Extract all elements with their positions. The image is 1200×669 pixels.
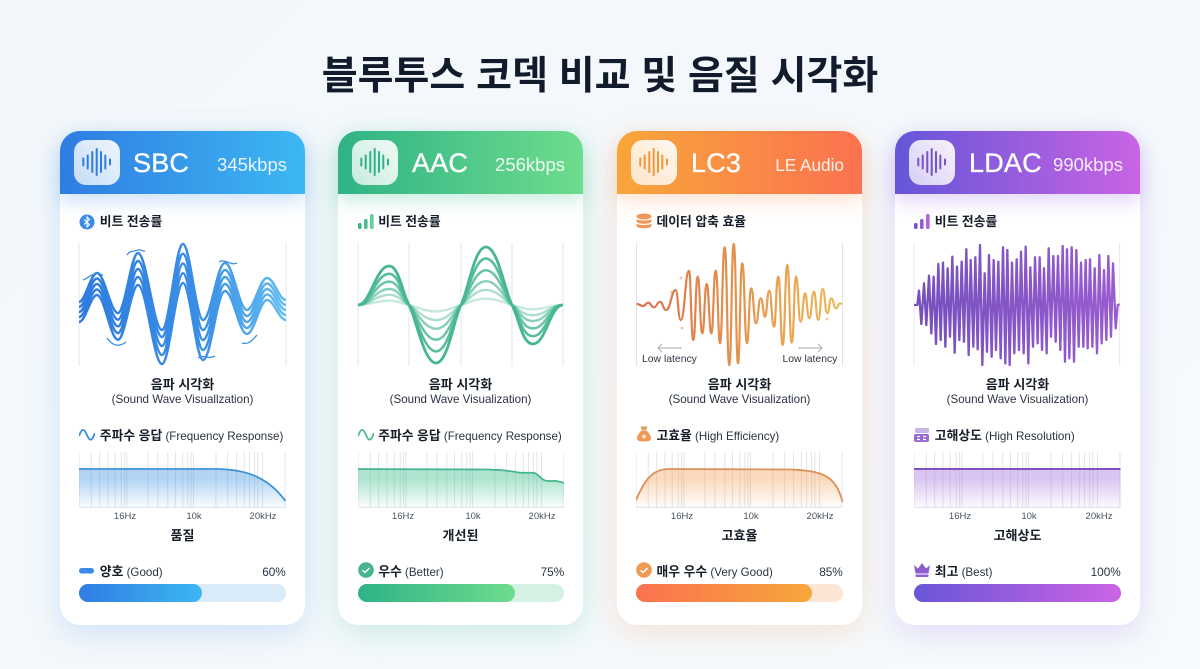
- axis labels: 16Hz: [392, 511, 414, 522]
- wave caption: 음파 시각화: [151, 377, 214, 392]
- icon: sound wave: [631, 140, 677, 185]
- codec name: AAC: [412, 148, 468, 178]
- icon: signal bars: [914, 214, 930, 229]
- panel: LDAC: 10k: [1021, 511, 1037, 522]
- axis labels: 16Hz: [949, 511, 971, 522]
- LDAC header: [895, 131, 1140, 194]
- rating label: 최고 (Best): [935, 564, 992, 579]
- wave caption english: (Sound Wave Visuallzation): [112, 393, 253, 406]
- progress bar: [79, 584, 286, 602]
- rating label: 매우 우수 (Very Good): [656, 564, 773, 579]
- progress fill: [914, 584, 1121, 602]
- axis labels: 16Hz: [114, 511, 136, 522]
- format label: LE Audio: [775, 155, 844, 175]
- progress fill: [358, 584, 515, 602]
- panel: SBC: 10k: [186, 511, 202, 522]
- sound wave chart: [636, 242, 843, 366]
- panel: LC3: [617, 131, 862, 625]
- sound wave chart: [78, 242, 286, 366]
- section heading: 비트 전송률: [935, 214, 997, 229]
- icon: crown: [914, 563, 930, 577]
- panel: LC3: 10k: [743, 511, 759, 522]
- wave caption english: (Sound Wave Visualization): [390, 393, 531, 406]
- bitrate: 256kbps: [495, 154, 565, 175]
- icon: sound wave: [74, 140, 120, 185]
- icon: check circle: [636, 562, 652, 578]
- icon: bluetooth: [80, 214, 94, 230]
- icon: sine wave: [358, 429, 374, 441]
- title: 블루투스 코덱 비교 및 음질 시각화: [322, 55, 878, 98]
- SBC header: [60, 131, 305, 194]
- axis labels: 16Hz: [671, 511, 693, 522]
- frequency response chart: [636, 452, 843, 508]
- panel: AAC: [338, 131, 583, 625]
- efficiency heading: 고효율 (High Efficiency): [656, 428, 779, 443]
- progress bar: [358, 584, 564, 602]
- wave caption english: (Sound Wave Visualization): [947, 393, 1088, 406]
- frequency heading: 주파수 응답 (Frequency Response): [378, 428, 562, 443]
- wave caption english: (Sound Wave Visualization): [669, 393, 810, 406]
- panel: AAC: 20kHz: [529, 511, 555, 522]
- frequency heading: 주파수 응답 (Frequency Response): [100, 428, 283, 443]
- rating label: 양호 (Good): [100, 564, 163, 579]
- frequency response chart: [358, 452, 564, 508]
- LC3 header: [617, 131, 862, 194]
- AAC header: [338, 131, 583, 194]
- codec name: LC3: [691, 148, 741, 178]
- icon: sound wave: [909, 140, 955, 185]
- panel: SBC: [60, 131, 305, 625]
- percent: 100%: [1091, 565, 1121, 579]
- frequency response chart: [79, 452, 286, 508]
- wave caption: 음파 시각화: [429, 377, 492, 392]
- bitrate: 345kbps: [217, 154, 287, 175]
- chart caption: 품질: [171, 528, 194, 543]
- wave caption: 음파 시각화: [708, 377, 771, 392]
- codec name: SBC: [133, 148, 189, 178]
- panel: LDAC: 20kHz: [1086, 511, 1112, 522]
- chart caption: 고효율: [722, 528, 757, 543]
- icon: sine wave: [79, 429, 95, 441]
- icon: high resolution badge: [914, 428, 929, 442]
- progress fill: [636, 584, 812, 602]
- percent: 85%: [819, 565, 843, 579]
- progress bar: [914, 584, 1121, 602]
- icon: money bag: [637, 426, 651, 442]
- arrow: low latency left: [657, 344, 682, 352]
- section heading: 비트 전송률: [100, 214, 162, 229]
- percent: 60%: [262, 565, 286, 579]
- icon: dash pill: [79, 568, 94, 574]
- progress fill: [79, 584, 202, 602]
- section heading: 데이터 압축 효율: [656, 214, 746, 229]
- chart caption: 개선된: [443, 528, 478, 543]
- panel: AAC: 10k: [465, 511, 481, 522]
- panel: LC3: 20kHz: [807, 511, 833, 522]
- frequency response chart: [914, 452, 1120, 508]
- label: low latency right: Low latency: [782, 354, 837, 365]
- resolution heading: 고해상도 (High Resolution): [935, 428, 1075, 443]
- arrow: low latency right: [798, 344, 823, 352]
- panel: SBC: 20kHz: [250, 511, 276, 522]
- codec name: LDAC: [969, 148, 1042, 178]
- progress bar: [636, 584, 842, 602]
- icon: database: [636, 214, 652, 228]
- panel: LDAC: [895, 131, 1140, 625]
- rating label: 우수 (Better): [378, 564, 444, 579]
- icon: signal bars: [358, 214, 374, 229]
- section heading: 비트 전송률: [378, 214, 441, 229]
- chart caption: 고해상도: [994, 528, 1041, 543]
- icon: sound wave: [352, 140, 398, 185]
- icon: check circle: [358, 562, 374, 578]
- bitrate: 990kbps: [1053, 154, 1123, 175]
- label: low latency left: Low latency: [642, 354, 697, 365]
- wave caption: 음파 시각화: [986, 377, 1049, 392]
- percent: 75%: [541, 565, 564, 579]
- sound wave chart: [914, 243, 1120, 366]
- sound wave chart: [358, 243, 564, 366]
